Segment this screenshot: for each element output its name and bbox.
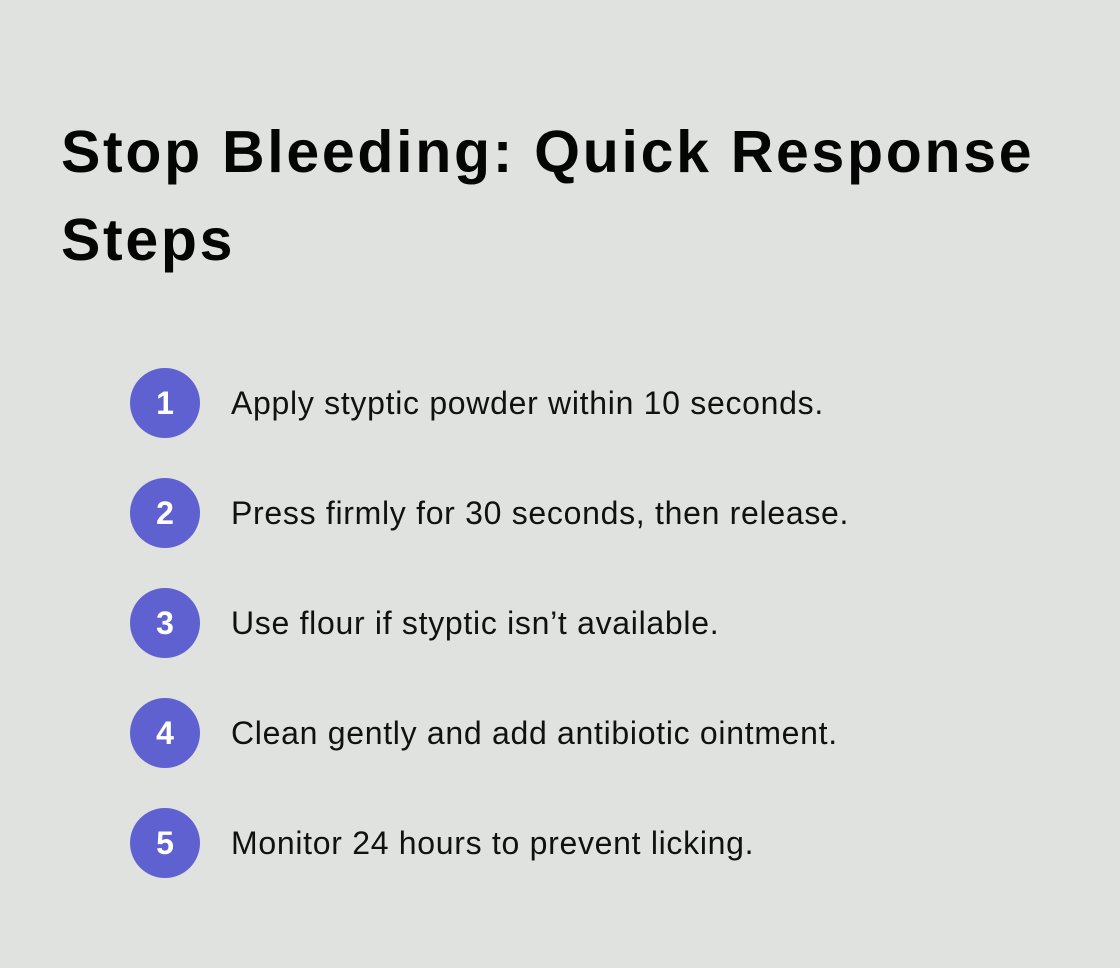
step 3: Use flour if styptic isn’t available.	[231, 605, 719, 641]
step 4: Clean gently and add antibiotic ointment.	[231, 715, 838, 751]
step 3: 3	[156, 605, 174, 641]
step 5: Monitor 24 hours to prevent licking.	[231, 825, 754, 861]
step 2: Press firmly for 30 seconds, then release.	[231, 495, 849, 531]
step 5	[130, 808, 754, 878]
step 1: 1	[156, 385, 174, 421]
step 4	[130, 698, 838, 768]
steps list	[130, 368, 849, 878]
step 4: 4	[156, 715, 174, 751]
step 5: 5	[156, 825, 174, 861]
step 1: Apply styptic powder within 10 seconds.	[231, 385, 824, 421]
title: Stop Bleeding: Quick Response Steps	[61, 119, 1034, 273]
step 2	[130, 478, 849, 548]
step 1	[130, 368, 824, 438]
step 3	[130, 588, 719, 658]
step 2: 2	[156, 495, 174, 531]
